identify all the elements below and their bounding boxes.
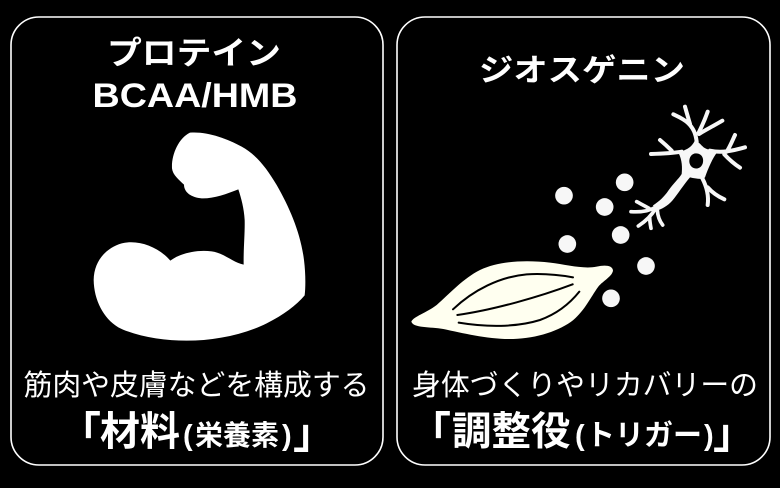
- icon: flexed arm: [94, 133, 305, 341]
- emphasis: regulator: トリガー: [586, 419, 702, 452]
- description: protein: 筋肉や皮膚などを構成する: [24, 369, 370, 402]
- panel border: [397, 17, 770, 465]
- panel: protein: [11, 17, 383, 465]
- panel border: [11, 17, 383, 465]
- emphasis: material: [59, 409, 335, 457]
- emphasis: material: 」: [293, 410, 335, 457]
- emphasis: regulator: ): [704, 420, 714, 452]
- heading: BCAA/HMB: BCAA/HMB: [92, 77, 298, 115]
- emphasis: material: 材料: [100, 410, 180, 454]
- emphasis: regulator: (: [575, 420, 585, 452]
- description: diosgenin: 身体づくりやリカバリーの: [412, 369, 758, 402]
- emphasis: regulator: 「: [409, 409, 451, 456]
- heading: protein: プロテイン: [107, 35, 281, 71]
- icon: muscle: [411, 261, 613, 339]
- panel: diosgenin: [397, 17, 770, 465]
- emphasis: material: ): [282, 420, 292, 452]
- illustration: muscle and particles: [411, 173, 655, 339]
- emphasis: material: 「: [59, 409, 101, 456]
- emphasis: material: 栄養素: [195, 420, 279, 451]
- heading: diosgenin: ジオスゲニン: [479, 53, 685, 88]
- emphasis: regulator: 」: [713, 410, 755, 457]
- icon: neuron: [631, 107, 745, 228]
- emphasis: regulator: 調整役: [452, 410, 570, 454]
- emphasis: regulator: [409, 409, 755, 457]
- particles: [555, 173, 655, 307]
- emphasis: material: (: [183, 420, 193, 452]
